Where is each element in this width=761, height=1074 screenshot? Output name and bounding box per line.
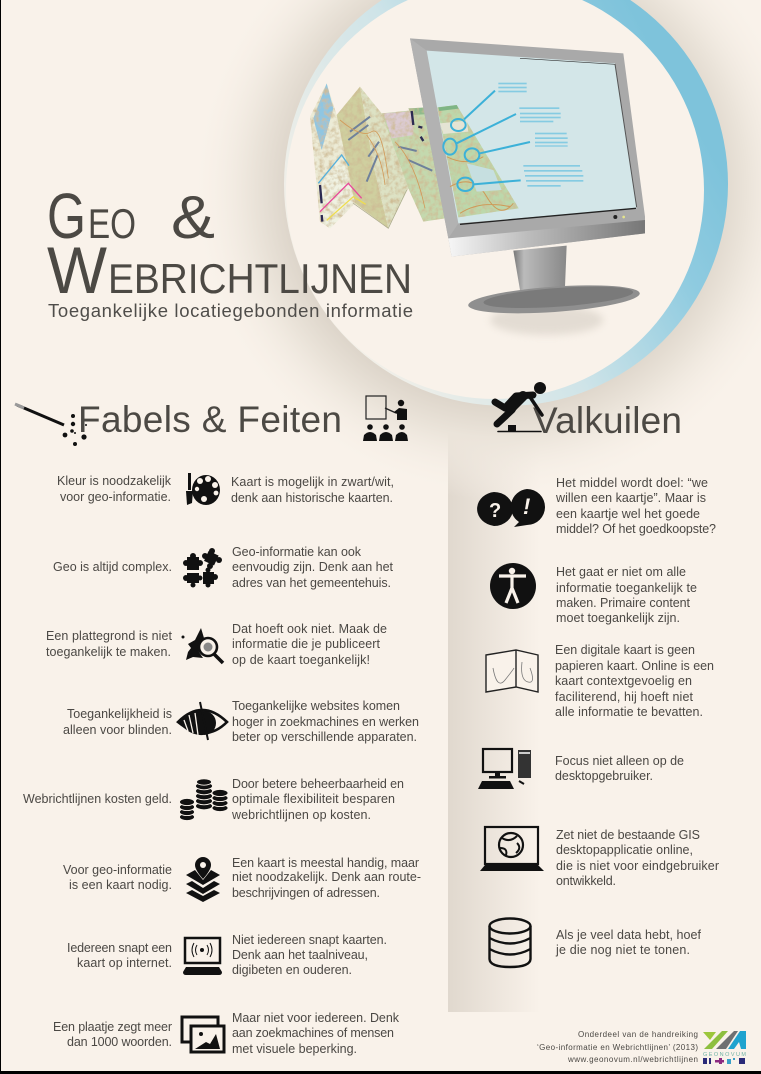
icon: stumbling person	[495, 382, 546, 432]
fact 8: Maar niet voor iedereen. Denk	[232, 1011, 400, 1025]
valkuil 1	[555, 476, 716, 536]
valkuil 1: willen een kaartje”. Maar is	[555, 491, 706, 505]
valkuil 3: kaart contextgevoelig en	[555, 674, 692, 688]
icon: database	[490, 918, 530, 967]
footer credit	[537, 1030, 698, 1064]
myth 4	[63, 707, 172, 737]
circle drop shadow	[180, 0, 761, 510]
fact 1: Kaart is mogelijk in zwart/wit,	[231, 475, 394, 489]
monitor	[410, 38, 645, 335]
icon: folded paper map	[486, 650, 538, 692]
fact 7	[232, 933, 387, 977]
fact 4	[232, 699, 419, 744]
icon: desktop computer	[478, 749, 531, 789]
fact 2: eenvoudig zijn. Denk aan het	[232, 560, 394, 574]
valkuil 6: Als je veel data hebt, hoef	[556, 928, 702, 942]
myth 7	[67, 941, 172, 970]
illustration: folded map and monitor	[310, 38, 645, 335]
valkuil 4: Focus niet alleen op de	[555, 754, 684, 768]
column shading: valkuilen	[448, 400, 540, 1012]
myth 5: Webrichtlijnen kosten geld.	[23, 792, 172, 806]
fact 4: beter op verschillende apparaten.	[232, 730, 417, 744]
icon: laptop with signal	[183, 938, 222, 975]
valkuil 5: die is niet voor eindgebruiker	[556, 859, 719, 873]
fact 5: webrichtlijnen op kosten.	[231, 808, 371, 822]
heading: Fabels & Feiten: Fabels & Feiten	[78, 399, 342, 440]
icon: accessibility figure	[490, 563, 536, 609]
valkuil 2: Het gaat er niet om alle	[556, 565, 686, 579]
title	[47, 180, 412, 307]
icon: eye	[178, 702, 227, 740]
icon: coin stacks	[180, 779, 228, 821]
fact 1: denk aan historische kaarten.	[231, 491, 393, 505]
title: &	[171, 184, 215, 251]
myth 7: kaart op internet.	[77, 956, 172, 970]
icon: presenter and audience	[363, 396, 408, 441]
valkuil 4: desktopgebruiker.	[555, 769, 653, 783]
circle with blue ring	[284, 0, 728, 406]
valkuil 5: ontwikkeld.	[556, 874, 616, 888]
icon: laptop with globe	[480, 827, 544, 871]
fact 4: hoger in zoekmachines en werken	[232, 715, 419, 729]
valkuil 3	[555, 643, 714, 719]
valkuil 3: alle informatie te bevatten.	[555, 705, 703, 719]
valkuil 3: Een digitale kaart is geen	[555, 643, 695, 657]
fact 2: Geo-informatie kan ook	[232, 545, 362, 559]
title: W	[47, 233, 108, 307]
myth 4: alleen voor blinden.	[63, 723, 172, 737]
fact 5	[231, 777, 404, 822]
subtitle: Toegankelijke locatiegebonden informatie	[48, 300, 413, 321]
valkuil 2: maken. Primaire content	[556, 596, 691, 610]
fact 8: met visuele beperking.	[232, 1042, 357, 1056]
callout lines	[443, 91, 530, 191]
myth 1	[57, 474, 172, 504]
myth 8: dan 1000 woorden.	[67, 1035, 172, 1049]
icon: puzzle pieces	[183, 548, 222, 588]
icon: speech bubbles: !	[523, 494, 530, 519]
valkuil 3: papieren kaart. Online is een	[555, 659, 714, 673]
valkuil 6	[555, 928, 702, 957]
footer credit: Onderdeel van de handreiking	[578, 1030, 698, 1039]
folded map	[310, 83, 460, 228]
icon: stacked pictures	[182, 1017, 224, 1052]
fact 8	[232, 1011, 400, 1056]
icon: palette and brush	[186, 473, 220, 505]
fact 3: op de kaart toegankelijk!	[232, 653, 370, 667]
map on screen	[437, 105, 519, 217]
myth 6: is een kaart nodig.	[69, 878, 172, 892]
logo: Geonovum: GEONOVUM	[703, 1052, 746, 1058]
callout placeholder text	[498, 83, 583, 187]
monitor stand	[467, 246, 641, 318]
myth 1: voor geo-informatie.	[60, 490, 171, 504]
title: G	[47, 180, 86, 252]
icon: map under magnifier	[182, 628, 223, 663]
myth 1: Kleur is noodzakelijk	[57, 474, 172, 488]
fact 6: niet noodzakelijk. Denk aan route-	[232, 870, 421, 884]
footer credit: www.geonovum.nl/webrichtlijnen	[567, 1055, 698, 1064]
fact 1	[231, 475, 394, 505]
myth 6: Voor geo-informatie	[63, 863, 172, 877]
myth 4: Toegankelijkheid is	[67, 707, 172, 721]
valkuil 1: een kaartje wel het goede	[556, 507, 700, 521]
myth 3	[46, 629, 173, 659]
icon: magic wand	[15, 404, 87, 446]
fact 7: Denk aan het taalniveau,	[232, 948, 368, 962]
valkuil 5: Zet niet de bestaande GIS	[556, 828, 700, 842]
logo: Geonovum	[703, 1031, 746, 1064]
valkuil 3: faciliterend, hij hoeft niet	[555, 690, 694, 704]
fact 6: beschrijvingen of adressen.	[232, 886, 380, 900]
fact 5: Door betere beheerbaarheid en	[232, 777, 404, 791]
fact 5: optimale flexibiliteit besparen	[232, 792, 395, 806]
valkuil 2: moet toegankelijk zijn.	[556, 611, 680, 625]
fact 6: Een kaart is meestal handig, maar	[232, 856, 419, 870]
valkuil 1: middel? Of het goedkoopste?	[556, 522, 716, 536]
fact 6	[232, 856, 421, 900]
fact 8: aan zoekmachines of mensen	[232, 1026, 394, 1040]
heading: Valkuilen: Valkuilen	[533, 400, 682, 441]
fact 3: Dat hoeft ook niet. Maak de	[232, 622, 387, 636]
icon: speech bubbles	[477, 489, 545, 528]
fact 4: Toegankelijke websites komen	[232, 699, 400, 713]
fact 3: informatie die je publiceert	[232, 637, 381, 651]
fact 2: adres van het gemeentehuis.	[232, 576, 391, 590]
valkuil 1: Het middel wordt doel: “we	[556, 476, 708, 490]
icon: location pin on layers	[186, 857, 220, 902]
fact 2	[232, 545, 394, 590]
valkuil 2	[556, 565, 697, 625]
fact 7: Niet iedereen snapt kaarten.	[232, 933, 387, 947]
valkuil 2: informatie toegankelijk te	[556, 581, 697, 595]
valkuil 4	[555, 754, 684, 783]
myth 8	[53, 1020, 172, 1049]
myth 2: Geo is altijd complex.	[53, 560, 172, 574]
myth 3: toegankelijk te maken.	[46, 645, 171, 659]
fact 7: digibeten en ouderen.	[232, 963, 352, 977]
valkuil 5: desktopapplicatie online,	[556, 843, 693, 857]
icon: speech bubbles: ?	[489, 500, 501, 522]
myth 6	[63, 863, 172, 892]
title: EBRICHTLIJNEN	[108, 255, 412, 302]
fact 3	[232, 622, 387, 667]
myth 8: Een plaatje zegt meer	[53, 1020, 172, 1034]
footer credit: ‘Geo-informatie en Webrichtlijnen’ (2013)	[537, 1043, 698, 1052]
valkuil 5	[556, 828, 719, 888]
myth 3: Een plattegrond is niet	[46, 629, 173, 643]
myth 7: Iedereen snapt een	[67, 941, 172, 955]
valkuil 6: je die nog niet te tonen.	[555, 943, 690, 957]
title: EO	[88, 200, 136, 247]
